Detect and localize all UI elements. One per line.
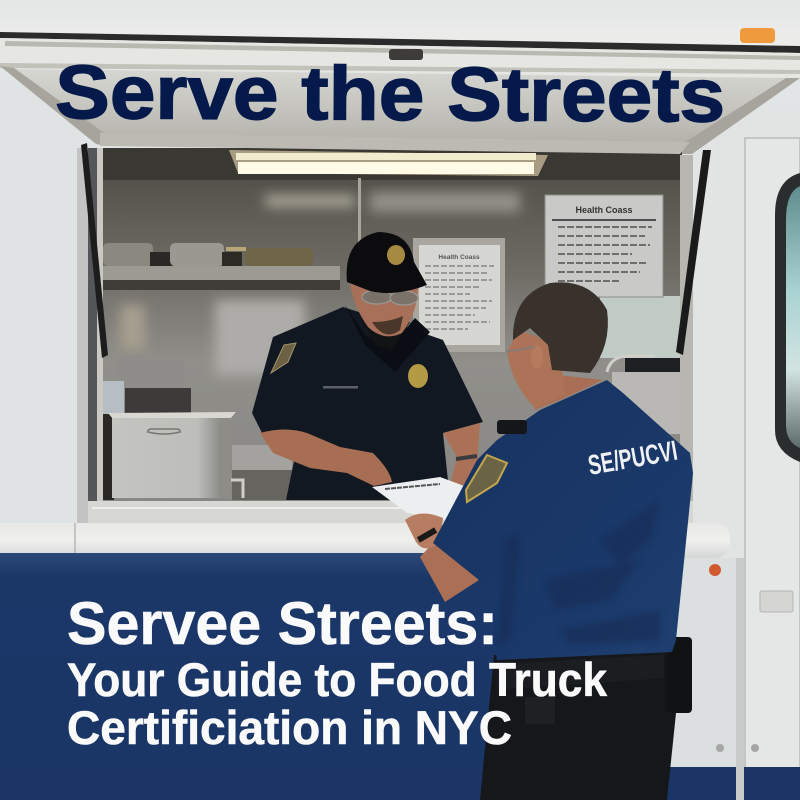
door edge (736, 558, 744, 800)
counter shelf (0, 501, 730, 558)
awning top rail (0, 38, 800, 78)
awning panel (0, 38, 800, 154)
inspector trousers (480, 650, 676, 800)
cook forearm pointing (260, 430, 392, 486)
inspector face (507, 330, 565, 408)
roof seal line (0, 32, 800, 53)
main title: Serve the Streets (55, 50, 725, 139)
subtitle: guide line two: Certificiation in NYC (67, 701, 512, 754)
awning bottom rail (100, 133, 690, 154)
cook torso (252, 307, 483, 500)
service window interior (100, 148, 682, 504)
wall highlights (120, 192, 520, 405)
subtitle: Servee Streets: Servee Streets: (67, 590, 498, 657)
shelf with pans (102, 243, 340, 290)
cap badge (387, 245, 405, 265)
jacket lettering: SE/PUCVI (586, 435, 680, 481)
notice heading: Health Coass (575, 205, 633, 215)
left truck wall (0, 80, 80, 553)
awning lower rail line (0, 63, 800, 74)
cook glasses (362, 290, 418, 305)
right truck wall and door (690, 110, 800, 773)
cook face (350, 283, 418, 336)
lower blue strip (668, 767, 800, 800)
inspector forearm and hand (405, 513, 479, 602)
radio (497, 420, 527, 434)
truck roof (0, 0, 800, 53)
awning hinge (389, 49, 423, 60)
notice: middle posted sheet (413, 238, 505, 352)
inspector neck (530, 372, 603, 410)
cook in black uniform (252, 232, 483, 500)
awning strap right (676, 150, 711, 355)
shelf board (102, 266, 340, 280)
subtitle: guide line one: Your Guide to Food Truck (67, 653, 608, 706)
steel containers on the left (100, 355, 191, 414)
icon: panel rivets (716, 744, 759, 752)
large steel box (108, 412, 243, 498)
door panel (745, 138, 800, 773)
awning strap left (81, 143, 108, 358)
door window glass (786, 186, 800, 448)
inspector in navy uniform (405, 282, 693, 800)
cook neck (362, 320, 410, 350)
document text lines (385, 484, 440, 489)
sheet lines (425, 266, 494, 329)
inspector ear (531, 345, 543, 369)
awning glass (12, 69, 788, 152)
cook collar (345, 305, 430, 372)
name strip (323, 386, 358, 388)
sheet heading: Health Coass (438, 254, 480, 261)
shirt badge (408, 364, 428, 388)
awning left brace (0, 66, 107, 146)
notice lines (552, 220, 656, 281)
cook cap (347, 232, 427, 293)
icon: orange marker light (740, 28, 775, 43)
inspector belt and gear (497, 637, 692, 724)
icon: orange reflector (709, 564, 721, 576)
shirt folds (498, 500, 660, 645)
cook beard (372, 316, 403, 334)
inspector hair (513, 282, 608, 373)
pans (103, 243, 313, 266)
awning right brace (682, 78, 800, 154)
inspector shirt (433, 380, 693, 660)
paper document (372, 477, 467, 521)
cook other forearm and hand (443, 423, 480, 487)
icon: door latch (760, 591, 793, 612)
shoulder patch (271, 343, 296, 373)
door window frame (775, 173, 800, 462)
lower white door panel (668, 558, 738, 768)
cook wristwatch (456, 456, 477, 459)
lower blue truck panel (0, 553, 672, 800)
shoulder patch (466, 455, 507, 502)
window at back right (600, 296, 680, 358)
notice: Health Coass (545, 195, 663, 297)
steel pot on the right (607, 356, 680, 434)
inspector glasses (506, 347, 535, 352)
ceiling light fixture (229, 150, 548, 176)
window frame posts (77, 143, 711, 523)
